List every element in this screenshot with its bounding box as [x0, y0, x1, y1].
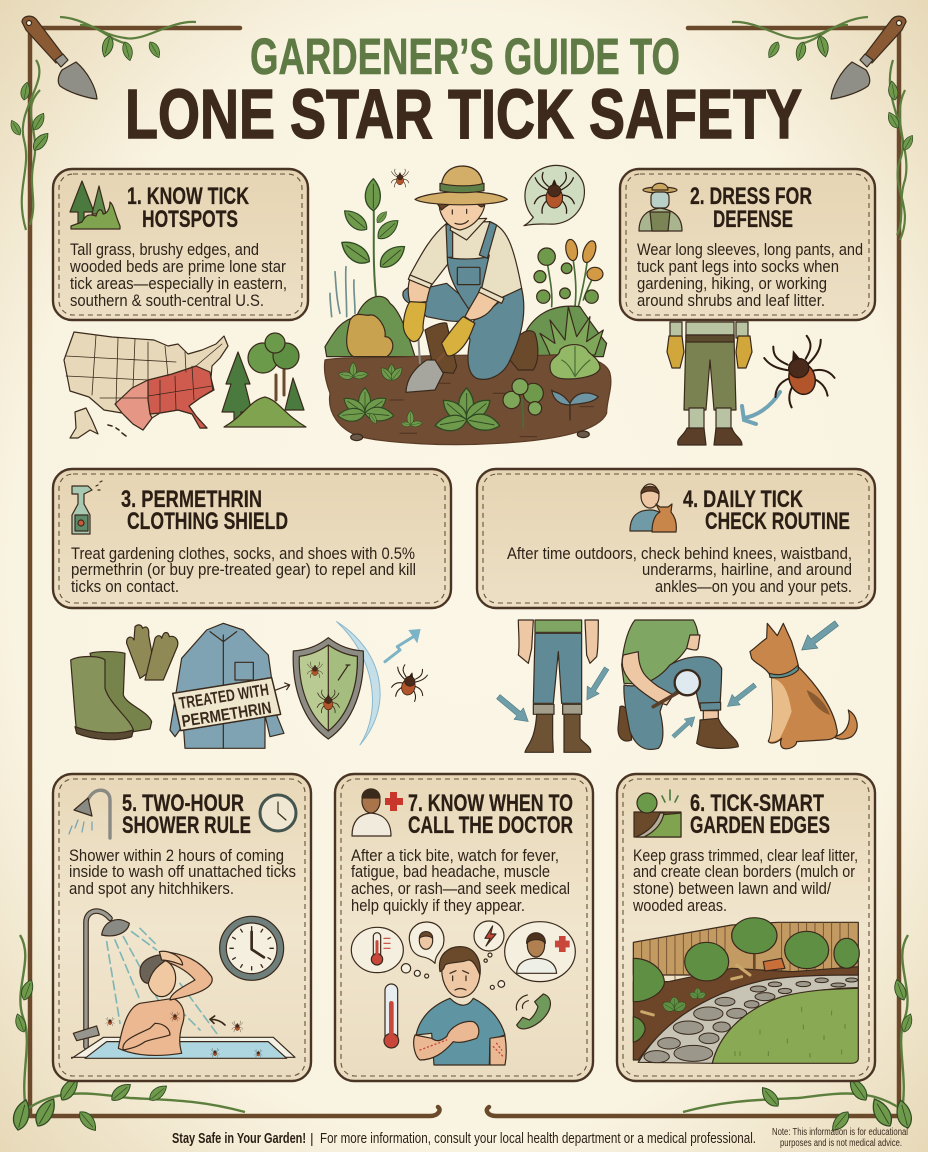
footer message: [172, 1130, 756, 1147]
fence: [633, 922, 858, 975]
panel box: [335, 774, 593, 1081]
body text: southern & south-central U.S.: [70, 291, 264, 310]
vine: lower left corner: [10, 935, 245, 1134]
ticks on body and water: [170, 1012, 180, 1021]
panel box: [620, 169, 875, 320]
icon: trees and grass: [70, 181, 120, 229]
repelled tick: [390, 663, 429, 703]
body text: help quickly if they appear.: [351, 896, 525, 915]
green bush left: [325, 296, 415, 357]
panel box: [617, 774, 875, 1081]
frame: top right bar: [688, 26, 892, 30]
title: [125, 28, 802, 153]
soil bed: [324, 355, 611, 445]
illustration: treated gear: [71, 622, 429, 748]
heading: 7. KNOW WHEN TO: [408, 790, 573, 817]
heading: [683, 486, 850, 535]
arrow: [742, 392, 780, 424]
vine: top right: [732, 17, 868, 62]
body text: Treat gardening clothes, socks, and shoes with 0.5%: [71, 544, 415, 563]
body text: ticks on contact.: [71, 577, 179, 596]
footer message: Stay Safe in Your Garden!: [172, 1131, 306, 1147]
barrier arc: [337, 622, 380, 745]
body text: ankles—on you and your pets.: [655, 577, 852, 596]
denim shirt: [170, 623, 284, 748]
body text: tick areas—especially in eastern,: [70, 274, 287, 293]
front lower leg and boot: [425, 323, 457, 373]
body text: [351, 846, 570, 915]
heading: HOTSPOTS: [142, 206, 238, 233]
icon: doctor and red cross: [352, 789, 403, 836]
heading: [122, 790, 251, 839]
body text: [69, 846, 296, 898]
trowel in hand: [435, 347, 452, 363]
trowel: top left: [22, 16, 97, 99]
tick: [760, 332, 839, 411]
body text: and create clean borders (mulch or: [633, 862, 855, 881]
collar and face: [450, 218, 487, 240]
heading: CHECK ROUTINE: [705, 508, 850, 535]
body text: underarms, hairline, and around: [642, 560, 852, 579]
heading: [690, 790, 830, 839]
body text: [637, 240, 863, 310]
vine: upper left post: [8, 60, 52, 230]
body text: wooded areas.: [632, 896, 727, 915]
body text: permethrin (or buy pre-treated gear) to repel and kill: [71, 560, 416, 579]
vine: upper right post: [885, 60, 916, 240]
footer message: |: [310, 1130, 314, 1146]
kneeling person: [618, 620, 738, 749]
body text: After a tick bite, watch for fever,: [351, 846, 559, 865]
heading: 3. PERMETHRIN: [121, 486, 262, 513]
panel 3: permethrin clothing shield: [53, 469, 451, 608]
heading: [127, 183, 249, 233]
footer: [172, 1127, 908, 1149]
check arrows: [494, 617, 842, 741]
panel box: [477, 469, 875, 608]
standing person: [518, 620, 598, 752]
vine: top left: [60, 17, 196, 62]
right plants: [534, 239, 603, 317]
panel 7: know when to call the doctor: [335, 774, 593, 1081]
sick man: [416, 998, 505, 1065]
lawn: [712, 988, 858, 1063]
gloves: [403, 302, 426, 342]
alaska and hawaii: [70, 408, 98, 438]
body text: gardening, hiking, or working: [637, 274, 827, 293]
central gardener illustration: [324, 165, 611, 445]
panel 5: two-hour shower rule: [53, 774, 311, 1081]
panel box: [53, 469, 451, 608]
thermometer: [384, 984, 399, 1048]
body text: [507, 544, 852, 596]
body text: Tall grass, brushy edges, and: [70, 240, 259, 259]
back boot: [510, 331, 538, 370]
heading: [408, 790, 573, 839]
bather: [118, 998, 184, 1055]
magnifying glass: [653, 670, 700, 707]
body text: After time outdoors, check behind knees, waistband,: [507, 544, 852, 563]
heading: CLOTHING SHIELD: [127, 508, 288, 535]
body text: and spot any hitchhikers.: [69, 879, 234, 898]
frame: bottom right bar: [487, 1107, 899, 1116]
treated with permethrin tag: [173, 678, 281, 731]
water streams: [107, 928, 217, 1033]
heading: SHOWER RULE: [122, 812, 251, 839]
garden illustration: [633, 918, 859, 1063]
dog: [750, 623, 857, 749]
right leg: [468, 258, 524, 379]
trees beside the map: [222, 333, 306, 427]
heading: 4. DAILY TICK: [683, 486, 803, 513]
trowel: top right: [831, 16, 906, 99]
tall plant left: [337, 179, 409, 303]
body text: Keep grass trimmed, clear leaf litter,: [633, 846, 858, 865]
heading: DEFENSE: [713, 206, 793, 233]
body text: fatigue, bad headache, muscle: [351, 862, 550, 881]
body text: Wear long sleeves, long pants, and: [637, 240, 863, 259]
panel 4: daily tick check routine: [477, 469, 875, 608]
shield: [293, 638, 363, 739]
shower illustration: [72, 911, 295, 1058]
heading: 5. TWO-HOUR: [122, 790, 244, 817]
body text: [71, 544, 416, 596]
icon: shower head: [69, 790, 110, 838]
phone: [517, 994, 550, 1029]
frame: left post: [28, 30, 32, 1116]
overalls bib: [447, 255, 489, 312]
frame: bottom left bar: [30, 1107, 440, 1116]
stone path: [638, 975, 858, 1063]
body text: tuck pant legs into socks when: [637, 257, 839, 276]
right bush with grass: [525, 306, 607, 357]
panel 2: dress for defense: [620, 169, 875, 320]
forearms: [408, 277, 432, 303]
icon: clock: [260, 795, 296, 831]
large tick with arrow: [742, 332, 839, 424]
US map: [64, 332, 228, 438]
heading: 6. TICK-SMART: [690, 790, 824, 817]
heading: 2. DRESS FOR: [690, 183, 812, 210]
treated with permethrin tag: TREATED WITH: [178, 680, 270, 713]
bathtub: [72, 1037, 295, 1058]
title line 1: GARDENER’S GUIDE TO: [250, 28, 680, 85]
straw hat: [441, 166, 483, 191]
mulch bed: [633, 967, 858, 1060]
frame: top left bar: [30, 26, 240, 30]
panel box: [53, 169, 308, 320]
speech bubble with tick: [524, 165, 584, 226]
small arrow: [275, 683, 290, 690]
footer message: For more information, consult your local health department or a medical professional.: [320, 1131, 756, 1147]
small plants and leaves: [642, 958, 785, 1015]
lettuce: [550, 345, 600, 379]
illustration: daily checks: [494, 617, 857, 752]
shirt: [447, 222, 522, 298]
yellow bush: [347, 314, 393, 357]
gardening gloves: [127, 625, 178, 680]
treated with permethrin tag: PERMETHRIN: [180, 698, 273, 731]
left thigh: [403, 283, 470, 321]
icon: person and cat: [630, 484, 676, 532]
thought bubbles: [351, 921, 575, 989]
body text: wooded beds are prime lone star: [69, 257, 286, 276]
symptoms illustration: [351, 921, 575, 1065]
panel 1: know tick hotspots: [53, 169, 308, 320]
body text: stone) between lawn and wild/: [633, 879, 831, 898]
panel box: [53, 774, 311, 1081]
heading: GARDEN EDGES: [690, 812, 830, 839]
heading: [690, 183, 812, 233]
blue stalks: [330, 267, 355, 317]
body text: Shower within 2 hours of coming: [69, 846, 284, 865]
panel 6: tick-smart garden edges: [617, 774, 875, 1081]
body text: [632, 846, 858, 915]
vine: lower right corner: [683, 935, 915, 1134]
frame: right post: [897, 30, 901, 1116]
protected legs illustration: [667, 322, 752, 445]
seedlings in soil: [337, 362, 598, 441]
clock on wall: [220, 916, 284, 980]
flying tick: [391, 169, 409, 187]
shrubs: [633, 918, 859, 1042]
body text: inside to wash off unattached ticks: [69, 862, 296, 881]
body text: [69, 240, 287, 310]
body text: aches, or rash—and seek medical: [351, 879, 570, 898]
heading: CALL THE DOCTOR: [408, 812, 573, 839]
icon: spray bottle: [72, 481, 102, 534]
shirt details: [210, 632, 253, 748]
disclaimer: [772, 1127, 908, 1149]
body text: around shrubs and leaf litter.: [637, 291, 825, 310]
rubber boots: [71, 652, 152, 740]
deflection arrow: [385, 636, 415, 662]
icon: protected gardener: [639, 183, 682, 231]
heading: [121, 486, 288, 535]
shower pole: [86, 911, 110, 1047]
heading: 1. KNOW TICK: [127, 183, 249, 210]
icon: garden edge: [634, 790, 681, 837]
